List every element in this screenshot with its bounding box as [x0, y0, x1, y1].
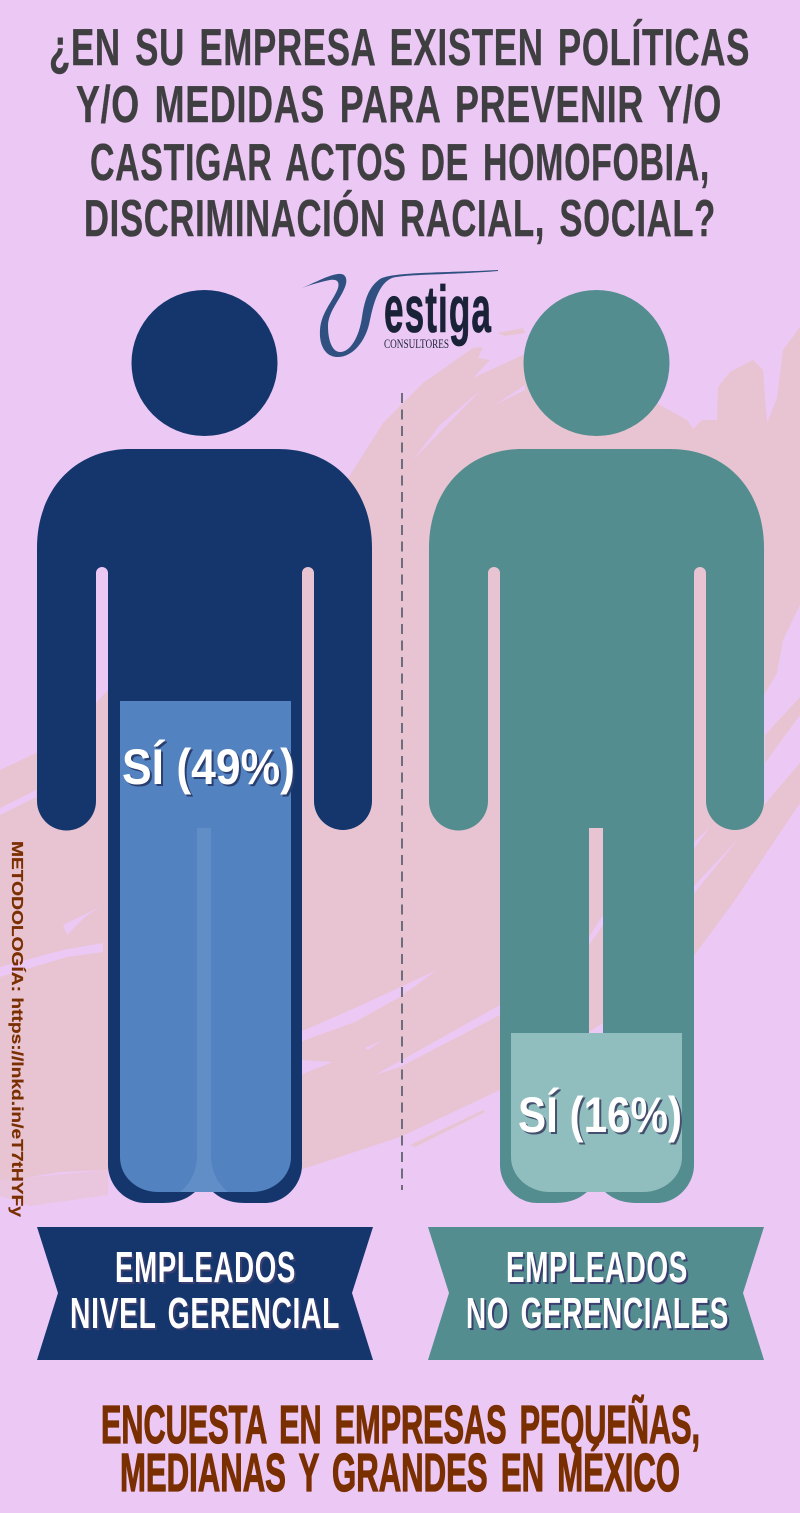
fill: 49 percent [120, 701, 291, 1192]
label: 49 percent: SÍ (49%) [122, 739, 295, 795]
background brush stroke [0, 327, 800, 1206]
figure: managers [37, 290, 372, 1203]
logo: Vestiga Consultores [302, 270, 498, 357]
banner: non-managers: EMPLEADOS [506, 1243, 688, 1292]
fill: 16 percent [511, 1033, 682, 1192]
banner: managers [37, 1227, 373, 1360]
footer heading [101, 1395, 700, 1503]
figure: non-managers [429, 290, 764, 1203]
banner: managers: NIVEL GERENCIAL [70, 1289, 340, 1338]
divider [401, 393, 403, 1190]
label: 16 percent: SÍ (16%) [518, 1087, 682, 1143]
banner: non-managers [428, 1227, 764, 1360]
leg gap highlight [180, 828, 228, 1192]
logo: Vestiga Consultores: CONSULTORES [384, 337, 449, 351]
banner: managers: NIVEL GERENCIAL [72, 1291, 342, 1340]
logo: Vestiga Consultores: estiga [384, 272, 492, 346]
label: 49 percent: SÍ (49%) [124, 741, 297, 797]
title [49, 19, 750, 248]
banner: managers: EMPLEADOS [117, 1245, 298, 1294]
banner: managers: EMPLEADOS [115, 1243, 296, 1292]
banner: non-managers: EMPLEADOS [508, 1245, 690, 1294]
label: 16 percent: SÍ (16%) [520, 1089, 684, 1145]
methodology note: METODOLOGÍA: https://lnkd.in/eT7tHYFy [8, 841, 25, 1217]
